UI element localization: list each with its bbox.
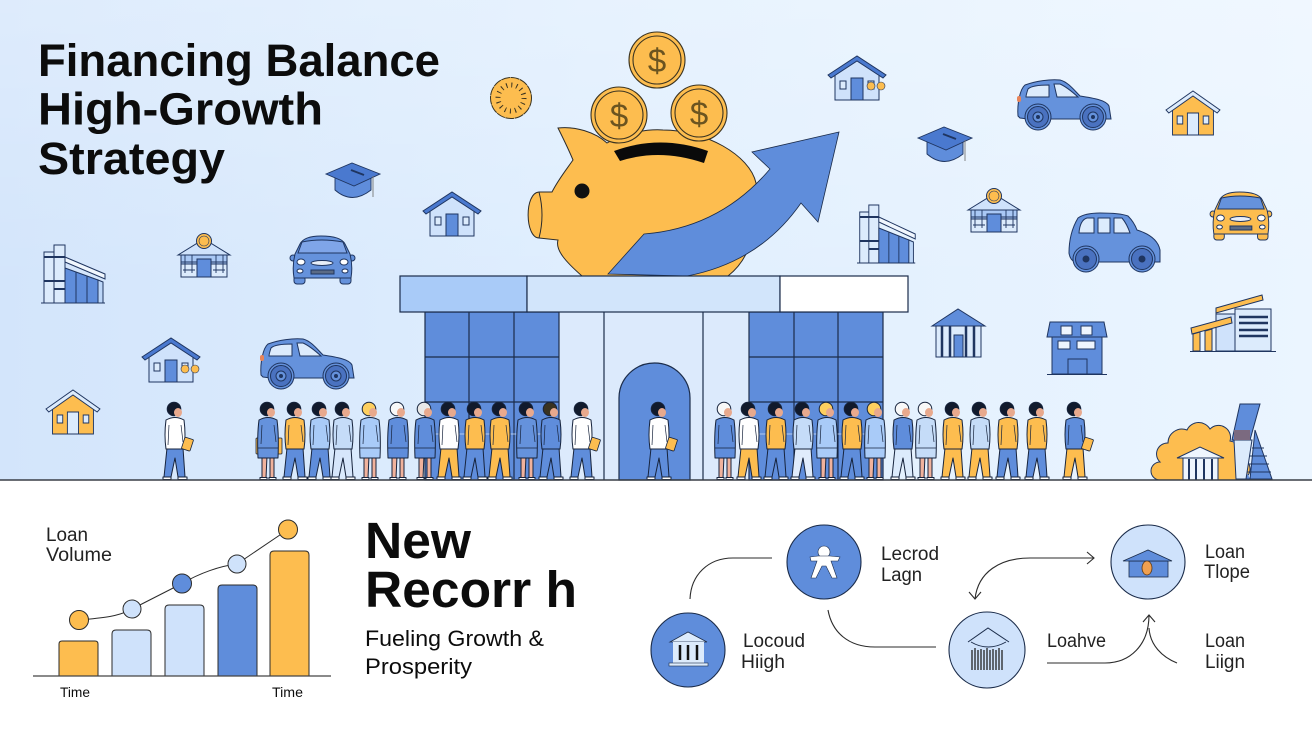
- person: [517, 402, 537, 480]
- icon: pillar bank: [932, 309, 985, 357]
- flow diagram: [651, 525, 1250, 688]
- person at door: [647, 402, 678, 480]
- roof band: [400, 276, 908, 312]
- person: [256, 402, 282, 480]
- headline: [365, 512, 577, 618]
- icon: graduation cap left: [326, 163, 380, 198]
- title: High-Growth: [38, 84, 323, 134]
- coins: $: [690, 95, 708, 132]
- icon: orange house left: [46, 390, 100, 434]
- icon: orange house top right: [1166, 91, 1220, 135]
- coins: $: [610, 97, 628, 134]
- axis labels: [60, 684, 303, 700]
- node label: Lecrod: [881, 544, 939, 565]
- node: locoud high: [651, 613, 725, 687]
- icon: book building right: [857, 205, 915, 263]
- bar chart: loan volume: [33, 520, 331, 700]
- subheading: Prosperity: [365, 654, 473, 679]
- person: [415, 402, 435, 480]
- coins: [591, 32, 727, 143]
- node: loahve: [949, 612, 1025, 688]
- axis labels: Time: [272, 684, 303, 700]
- subheading: [365, 626, 544, 679]
- person: [941, 402, 965, 480]
- person: [817, 402, 837, 480]
- person: [764, 402, 788, 480]
- chart label: [46, 525, 112, 566]
- slot: [614, 142, 708, 163]
- subheading: Fueling Growth &: [365, 626, 544, 651]
- people queue right: [715, 402, 1094, 480]
- node: lecrod lagn: [787, 525, 861, 599]
- person: [437, 402, 461, 480]
- connectors: [690, 552, 1177, 663]
- icon: compact car: [1069, 213, 1160, 272]
- person: [283, 402, 307, 480]
- person: [840, 402, 864, 480]
- person: [388, 402, 408, 480]
- node label: Loan: [1205, 631, 1245, 652]
- node label: Lagn: [881, 565, 922, 586]
- person: [968, 402, 992, 480]
- left window grid: [425, 312, 559, 480]
- right window grid: [749, 312, 883, 480]
- person: [916, 402, 936, 480]
- person: [331, 402, 355, 480]
- icon: graduation cap right: [918, 127, 972, 162]
- icon: badge: [490, 78, 532, 118]
- person: [737, 402, 761, 480]
- person: [488, 402, 512, 480]
- title: Strategy: [38, 133, 225, 184]
- door: [619, 363, 690, 480]
- person: [463, 402, 487, 480]
- headline: Recorr h: [365, 561, 577, 618]
- person: [996, 402, 1020, 480]
- icon: house with flowers top: [828, 56, 886, 100]
- title: Financing Balance: [38, 35, 440, 86]
- people queue left: [256, 402, 678, 480]
- piggy bank: [528, 128, 757, 276]
- node: loan tlope: [1111, 525, 1185, 599]
- node label: [1204, 542, 1250, 583]
- building: [425, 312, 883, 480]
- icon: yellow car front: [1210, 192, 1272, 240]
- person: [791, 402, 815, 480]
- node label: Loan: [1205, 542, 1245, 563]
- node label: Hiigh: [741, 652, 785, 673]
- headline: New: [365, 512, 471, 569]
- person: [865, 402, 885, 480]
- person: [539, 402, 563, 480]
- icon: house with flowers left: [142, 338, 200, 382]
- icon: ladder: [1232, 404, 1272, 479]
- axis labels: Time: [60, 684, 90, 700]
- node label: Tlope: [1204, 562, 1250, 583]
- person walking left side: [163, 402, 194, 480]
- icon: coin house right: [968, 188, 1020, 232]
- chart label: Volume: [46, 545, 112, 566]
- title: [38, 35, 440, 184]
- person: [1063, 402, 1094, 480]
- node label: [881, 544, 939, 586]
- icon: coin house left: [178, 234, 230, 277]
- icon: bank with orange bush: [1151, 423, 1250, 480]
- icon: blue car front: [290, 236, 355, 284]
- icon: blue building: [1047, 322, 1107, 374]
- person: [715, 402, 735, 480]
- node label: Liign: [1205, 652, 1245, 673]
- icon: modern building: [1190, 295, 1276, 352]
- node label: Locoud: [743, 631, 805, 652]
- trend line: [70, 520, 298, 630]
- icon: car top right: [1017, 80, 1111, 130]
- growth arrow: [608, 132, 839, 276]
- icon: house left: [423, 192, 481, 236]
- person: [308, 402, 332, 480]
- chart label: Loan: [46, 525, 88, 546]
- icon: book building left: [41, 245, 105, 303]
- node label: Loahve: [1047, 631, 1106, 652]
- person: [1025, 402, 1049, 480]
- icon: car left: [260, 339, 354, 389]
- coins: $: [648, 42, 666, 79]
- person: [360, 402, 380, 480]
- bars: [59, 551, 309, 676]
- node label: [1205, 631, 1245, 673]
- node label: [741, 631, 805, 673]
- person: [570, 402, 601, 480]
- person: [891, 402, 915, 480]
